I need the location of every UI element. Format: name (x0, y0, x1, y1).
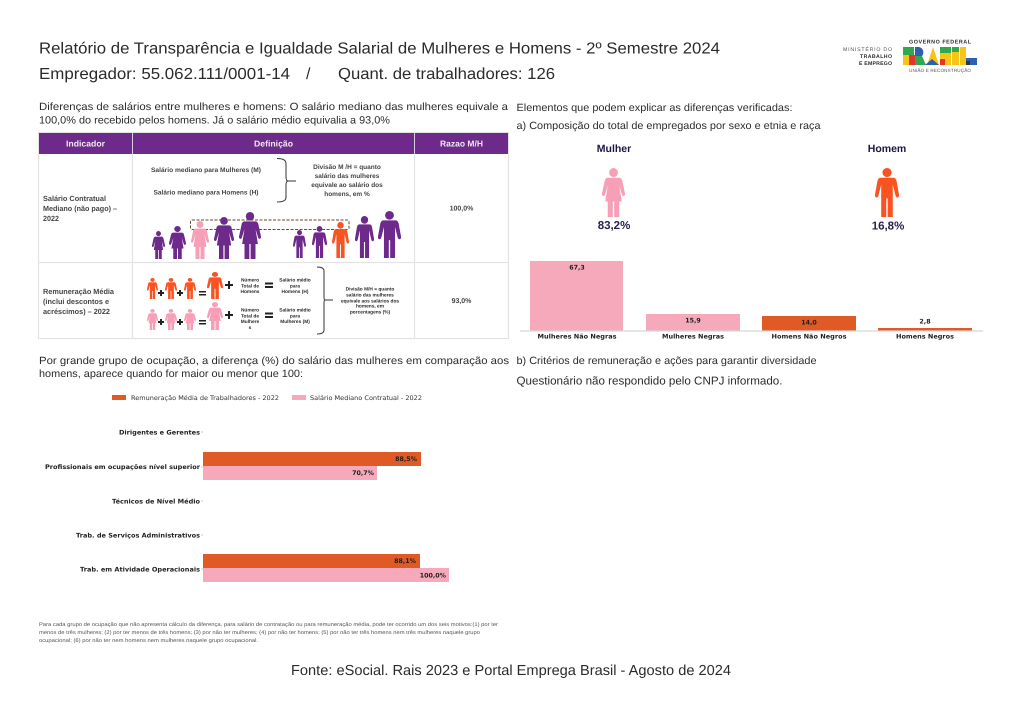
occupation text: homens, aparece quando for maior ou menor que 100: (39, 368, 303, 380)
definition: median salary: equivale ao salário dos (311, 182, 383, 189)
definition: median salary: homens, em % (324, 191, 370, 198)
intro text: Diferenças de salários entre mulheres e homens: O salário mediano das mulheres equivale a (39, 101, 508, 113)
bar chart: occupation groups: Trab. em Atividade Operacionais (80, 566, 200, 574)
definition: average pay: Número (241, 278, 259, 284)
definition: median salary (151, 158, 401, 259)
definition: average pay: Salário médio (279, 278, 311, 284)
footnote: Para cada grupo de ocupação que não apresenta cálculo da diferença, para salário de contratação ou para remuneração média, pode ter ocorrido um dos seis motivos:(1) por ter (39, 622, 498, 628)
definition: average pay: porcentagens (%) (350, 310, 391, 316)
source: Fonte: eSocial. Rais 2023 e Portal Emprega Brasil - Agosto de 2024 (291, 663, 731, 679)
definition: average pay: Total de (241, 284, 259, 290)
logo: governo federal: E EMPREGO (859, 61, 892, 67)
footnote: menos de três mulheres; (2) por ter menos de três homens; (3) por não ter mulheres; (4) por não ter homens; (5) por não ter três homens nem três mulheres naquele grupo (39, 630, 480, 636)
definition: average pay: Mulheres (M) (280, 319, 310, 325)
panel: indicator table: 100,0% (450, 206, 474, 212)
criteria text: Questionário não respondido pelo CNPJ informado. (516, 376, 782, 388)
definition: average pay: homens, em (356, 304, 384, 310)
bar chart: occupation groups: 70,7% (352, 470, 375, 477)
bar chart: occupation groups: 100,0% (420, 572, 447, 580)
icon: man (875, 168, 899, 217)
legend: Remuneração Média de Trabalhadores - 2022 (131, 394, 279, 402)
logo: governo federal: GOVERNO FEDERAL (909, 40, 972, 46)
definition: average pay: para (290, 314, 300, 320)
title (39, 40, 720, 83)
logo: governo federal: UNIÃO E RECONSTRUÇÃO (909, 67, 971, 73)
column chart: sex and race: 2,8 (919, 318, 931, 326)
bar chart: occupation groups: Dirigentes e Gerentes (119, 430, 200, 436)
definition: median salary: salário das mulheres (315, 173, 380, 180)
panel: indicator table: 93,0% (452, 298, 472, 305)
heading: right column: Elementos que podem explicar as diferenças verificadas: (516, 102, 792, 114)
intro text: 100,0% do recebido pelos homens. Já o salário médio equivalia a 93,0% (39, 114, 390, 126)
panel: indicator table (38, 132, 509, 339)
bar chart: occupation groups: 88,1% (394, 558, 417, 565)
intro text (39, 101, 508, 126)
criteria text: b) Critérios de remuneração e ações para garantir diversidade (516, 355, 817, 367)
definition: average pay: Mulhere (241, 319, 260, 325)
column chart: sex and race: Homens Não Negros (772, 334, 847, 340)
definition: average pay: s (249, 326, 252, 331)
occupation text: Por grande grupo de ocupação, a diferença (%) do salário das mulheres em comparação aos (39, 355, 509, 367)
definition: average pay: salário das mulheres (346, 292, 394, 298)
column chart: sex and race: 14,0 (801, 320, 817, 326)
title: Empregador: 55.062.111/0001-14 (39, 66, 290, 83)
logo: governo federal (843, 40, 977, 73)
panel: indicator table: Salário Contratual (43, 194, 106, 203)
bar chart: occupation groups: Técnicos de Nível Médio (112, 498, 201, 506)
definition: median salary: Salário mediano para Homens (H) (154, 190, 258, 196)
panel: indicator table: 2022 (43, 214, 59, 223)
definition: average pay: Divisão M/H = quanto (346, 286, 394, 292)
bar chart: occupation groups: Profissionais em ocupações nível superior (45, 463, 201, 471)
heading: right column: a) Composição do total de empregados por sexo e etnia e raça (516, 120, 821, 132)
definition: average pay: Homens (241, 289, 260, 295)
panel: sex composition: Mulher (597, 143, 631, 155)
bar chart: occupation groups: Trab. de Serviços Administrativos (76, 532, 200, 540)
panel: sex composition (597, 143, 906, 232)
column chart: sex and race: Mulheres Não Negras (538, 334, 617, 340)
panel: indicator table: Definição (254, 138, 293, 148)
criteria text (516, 355, 817, 388)
logo: governo federal: MINISTÉRIO DO (843, 46, 892, 53)
panel: sex composition: 83,2% (598, 220, 630, 232)
bar chart: occupation groups: 88,5% (395, 456, 418, 463)
column chart: sex and race: Homens Negros (896, 334, 954, 340)
icon: woman (602, 168, 625, 217)
panel: indicator table: (inclui descontos e (43, 297, 109, 306)
footnote (39, 622, 498, 644)
definition: average pay: Total de (241, 314, 259, 320)
title: Quant. de trabalhadores: 126 (338, 66, 555, 83)
legend: Salário Mediano Contratual - 2022 (310, 394, 422, 402)
panel: sex composition: 16,8% (872, 220, 904, 232)
panel: indicator table: Mediano (não pago) – (43, 204, 117, 213)
column chart: sex and race: 15,9 (685, 318, 701, 324)
definition: average pay: equivale aos salários dos (341, 298, 399, 304)
title: Relatório de Transparência e Igualdade Salarial de Mulheres e Homens - 2º Semestre 2024 (39, 40, 720, 58)
column chart: sex and race: Mulheres Negras (662, 334, 724, 340)
panel: indicator table: acréscimos) – 2022 (43, 307, 110, 316)
definition: average pay: para (290, 284, 300, 290)
legend (112, 394, 422, 402)
panel: indicator table: Remuneração Média (43, 287, 115, 296)
heading: right column (516, 102, 821, 132)
logo: governo federal: TRABALHO (860, 54, 892, 60)
definition: average pay: Número (241, 308, 259, 314)
bar chart: occupation groups (45, 430, 449, 582)
footnote: ocupacional; (6) por não ter nem homens nem mulheres naquele grupo ocupacional. (39, 638, 258, 644)
title: / (306, 66, 311, 83)
occupation text (39, 355, 509, 380)
panel: indicator table: Razao M/H (440, 138, 483, 148)
definition: average pay: Salário médio (279, 308, 311, 314)
panel: indicator table: Indicador (66, 138, 106, 148)
panel: sex composition: Homem (868, 143, 906, 155)
column chart: sex and race: 67,3 (569, 264, 585, 272)
column chart: sex and race (520, 261, 983, 340)
definition: average pay: Homens (H) (282, 289, 309, 295)
definition: median salary: Salário mediano para Mulheres (M) (151, 167, 261, 174)
definition: median salary: Divisão M /H = quanto (313, 164, 381, 171)
definition: average pay (147, 267, 399, 334)
